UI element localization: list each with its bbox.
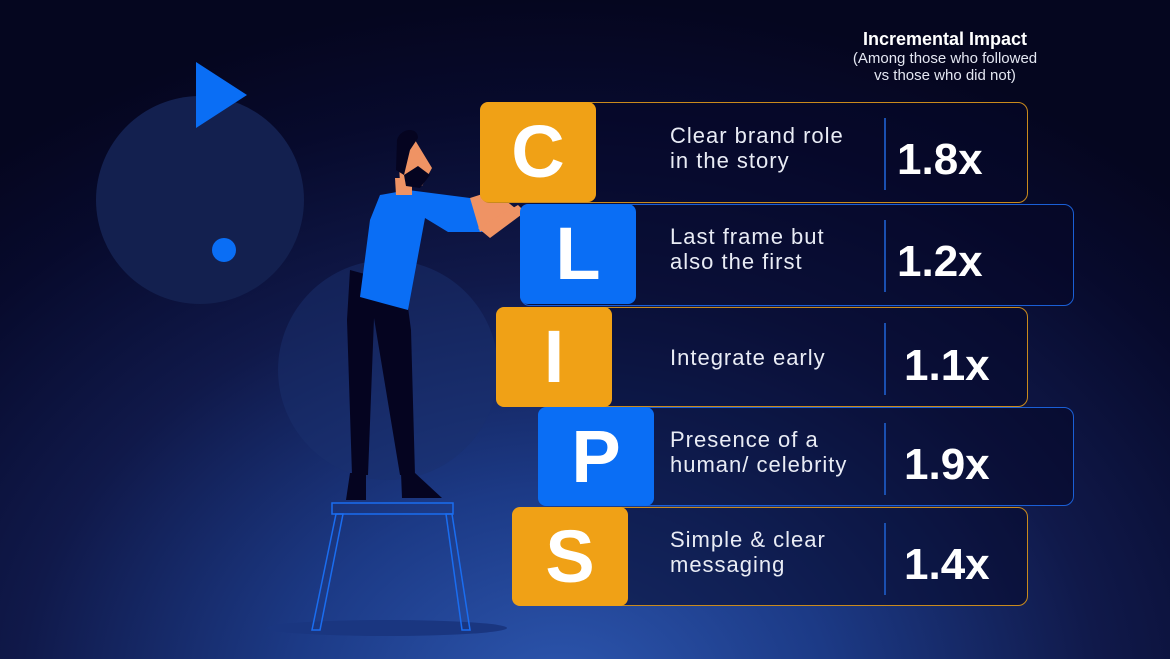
row L (520, 204, 1074, 306)
row I: Integrate early (670, 345, 826, 370)
row S (512, 507, 1028, 606)
row L: 1.2x (897, 237, 983, 286)
row L: L (555, 212, 601, 295)
row S: 1.4x (904, 540, 990, 589)
row C: 1.8x (897, 135, 983, 184)
heading: incremental impact (853, 29, 1037, 84)
row L: Last frame but (670, 224, 825, 249)
row S: Simple & clear (670, 527, 826, 552)
row C: in the story (670, 148, 790, 173)
row L: also the first (670, 249, 803, 274)
row P: Presence of a (670, 427, 819, 452)
row I: 1.1x (904, 341, 990, 390)
row P: 1.9x (904, 440, 990, 489)
heading: incremental impact: (Among those who followed (853, 50, 1037, 67)
row P: P (571, 415, 621, 498)
row S: S (545, 515, 595, 598)
heading: incremental impact: Incremental Impact (863, 29, 1027, 49)
row P (538, 407, 1074, 506)
heading: incremental impact: vs those who did not) (874, 67, 1016, 84)
row S: messaging (670, 552, 785, 577)
row C: Clear brand role (670, 123, 844, 148)
row P: human/ celebrity (670, 452, 847, 477)
row I: I (544, 315, 564, 398)
row C (480, 102, 1028, 203)
row I (496, 307, 1028, 407)
row C: C (511, 110, 565, 193)
